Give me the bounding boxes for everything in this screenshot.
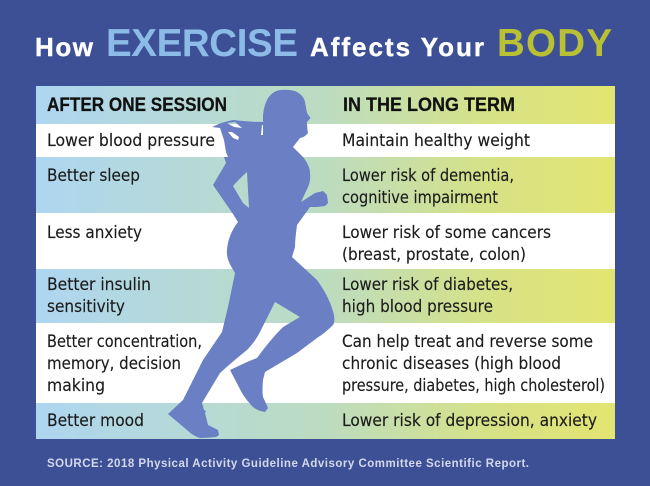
column: after one session: Better mood xyxy=(47,410,144,430)
column: in the long term: chronic diseases (high blood xyxy=(342,353,561,373)
column: in the long term: (breast, prostate, colon) xyxy=(342,244,526,264)
title xyxy=(35,22,612,65)
title: How xyxy=(35,32,94,62)
column: after one session: making xyxy=(47,375,105,395)
title: EXERCISE xyxy=(106,22,298,65)
column: after one session: Better concentration, xyxy=(47,331,202,351)
row band: mood xyxy=(36,403,615,439)
column: after one session xyxy=(47,94,227,430)
icon: running woman silhouette xyxy=(168,90,334,438)
column: after one session: memory, decision xyxy=(47,353,181,373)
column: in the long term: high blood pressure xyxy=(342,296,493,316)
row band: insulin xyxy=(36,269,615,323)
header row band xyxy=(36,86,615,124)
column: in the long term: Maintain healthy weight xyxy=(342,130,530,150)
heading: AFTER ONE SESSION xyxy=(47,94,227,116)
column: in the long term xyxy=(342,94,605,430)
column: in the long term: Lower risk of some cancers xyxy=(342,222,551,242)
column: after one session: sensitivity xyxy=(47,296,125,316)
heading: IN THE LONG TERM xyxy=(343,94,515,116)
column: after one session: Lower blood pressure xyxy=(47,130,215,150)
column: after one session: Better insulin xyxy=(47,274,151,294)
source note: SOURCE: 2018 Physical Activity Guideline Advisory Committee Scientific Report. xyxy=(47,458,529,470)
column: in the long term: pressure, diabetes, high cholesterol) xyxy=(342,375,605,395)
column: in the long term: cognitive impairment xyxy=(342,187,498,207)
column: after one session: Better sleep xyxy=(47,165,140,185)
column: in the long term: Lower risk of diabetes, xyxy=(342,274,513,294)
title: Affects Your xyxy=(310,32,484,62)
column: in the long term: Lower risk of depression, anxiety xyxy=(342,410,597,430)
row band: sleep xyxy=(36,157,615,213)
title: BODY xyxy=(497,22,612,65)
column: after one session: Less anxiety xyxy=(47,222,142,242)
column: in the long term: Can help treat and reverse some xyxy=(342,331,593,351)
column: in the long term: Lower risk of dementia, xyxy=(342,165,514,185)
panel: comparison table xyxy=(36,86,615,439)
